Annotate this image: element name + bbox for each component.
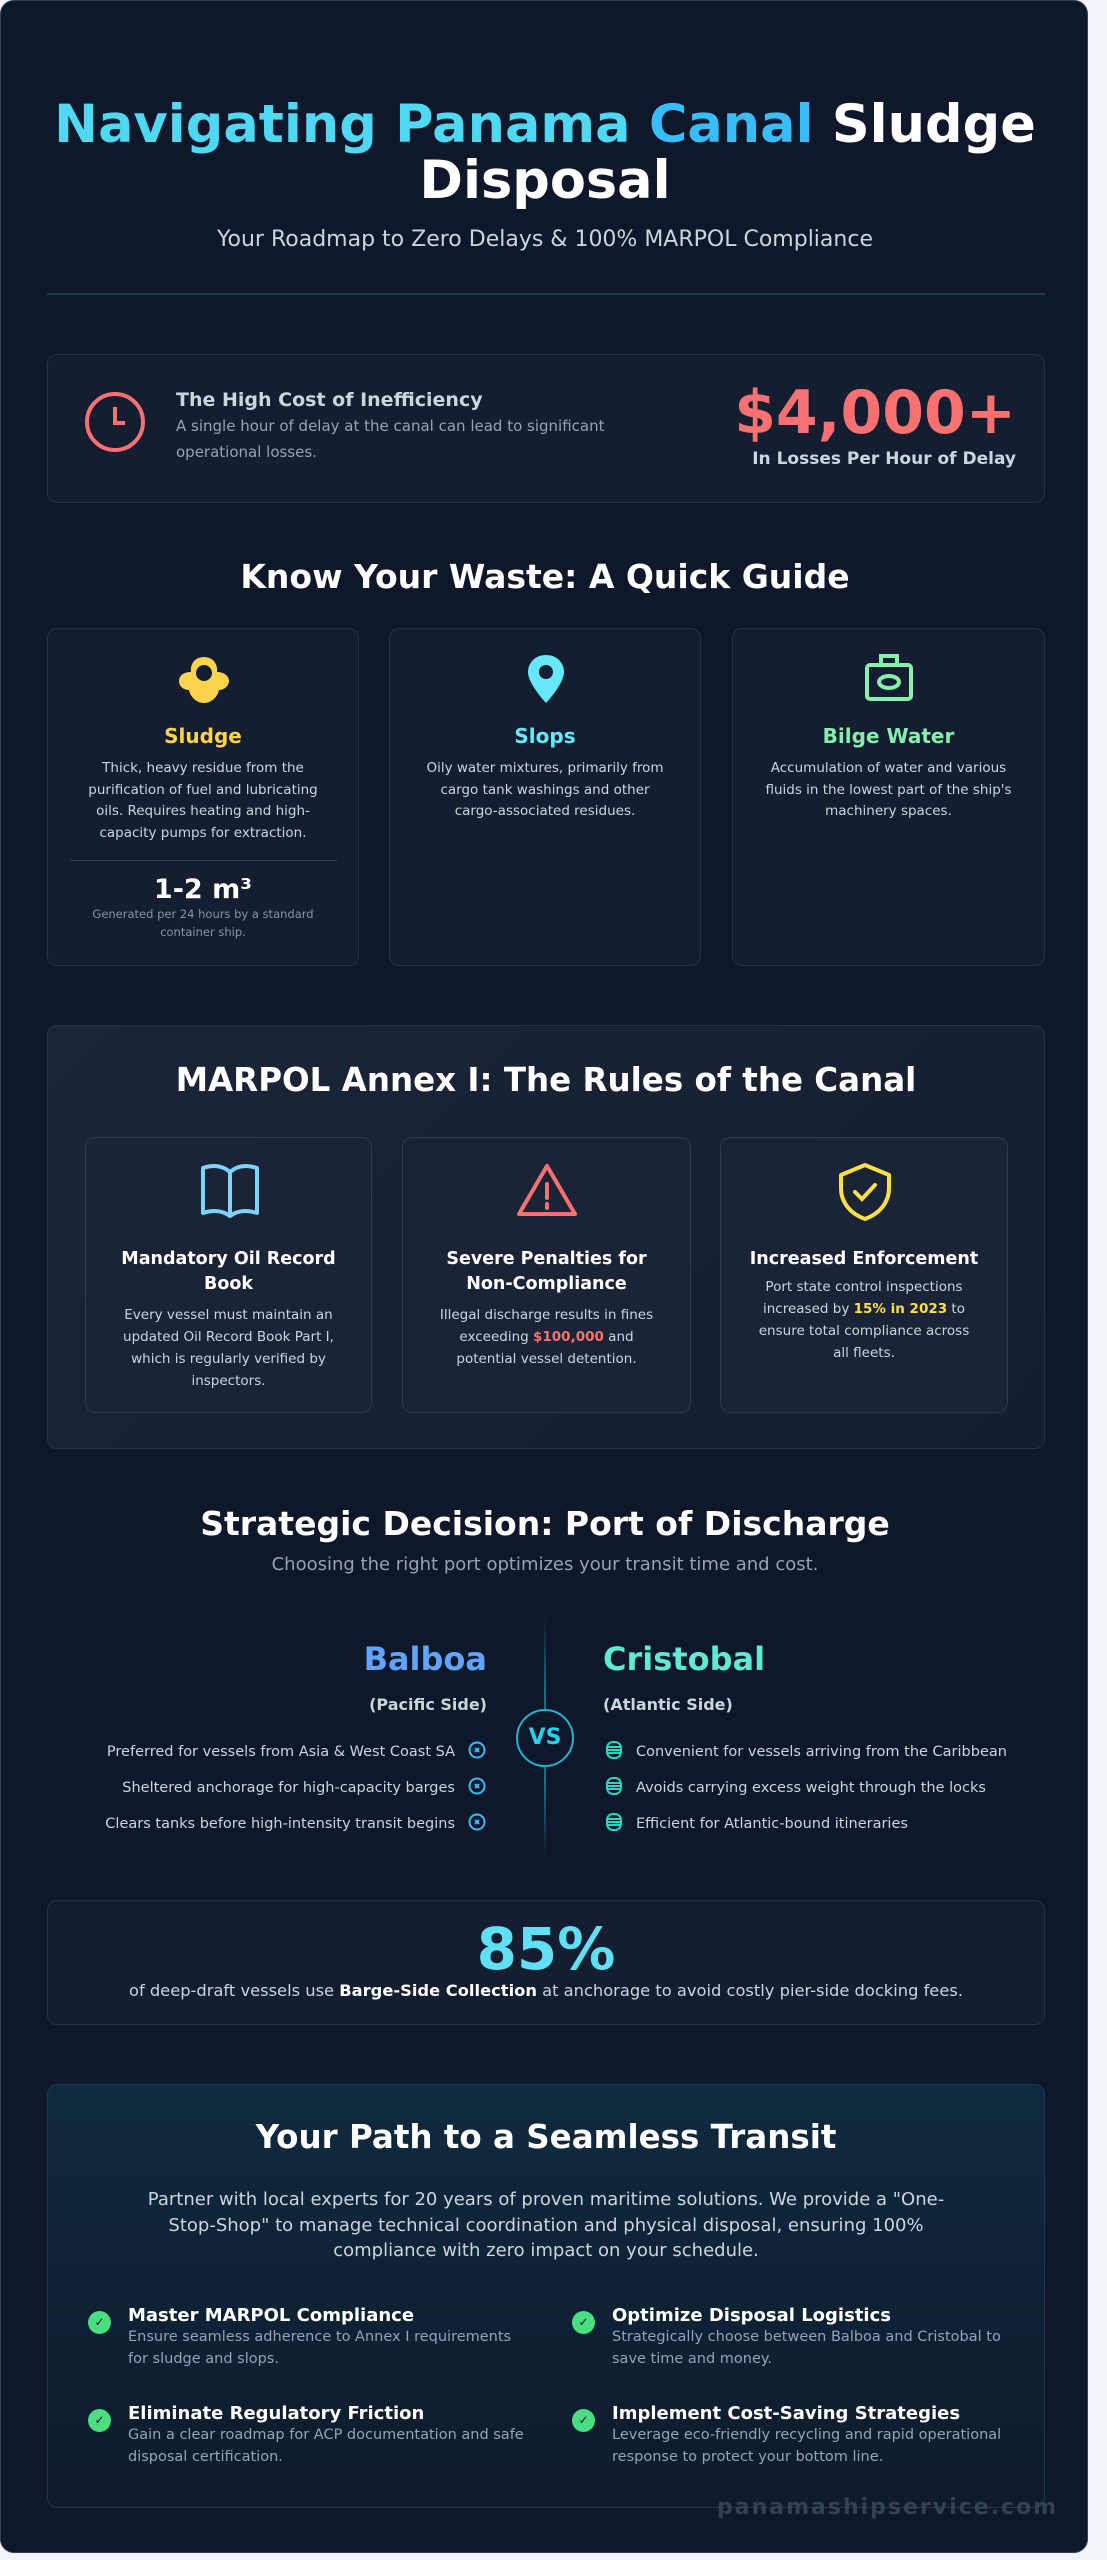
panel: Balboa: (Pacific Side) [369, 1695, 487, 1714]
subtitle: strategic: Choosing the right port optimizes your transit time and cost. [272, 1554, 818, 1575]
icon: sludge blob [179, 657, 229, 703]
stat: 1-2 m3 [92, 874, 314, 939]
card: enforcement [720, 1137, 1008, 1413]
text block: partner: Partner with local experts for 20 years of proven maritime solutions. We provide a "One-Stop-Shop" to manage technical coordination and physical disposal, ensuring 100% compliance with zero impact on your schedule. [148, 2189, 944, 2261]
item: eliminate friction: ✓ [94, 2413, 105, 2427]
card: enforcement: Increased Enforcement [750, 1249, 978, 1269]
panel: Cristobal: Cristobal [603, 1640, 765, 1678]
item: cost saving [572, 2403, 1001, 2465]
icon: clock [85, 392, 145, 452]
title: Navigating Panama Canal Sludge [54, 94, 1036, 155]
card: penalties: Illegal discharge results in fines exceeding $100,000 and potential vessel detention. [440, 1307, 653, 1367]
icon: VS circle [516, 1709, 574, 1767]
panel: Balboa: Clears tanks before high-intensity transit begins [105, 1816, 455, 1832]
panel: high cost [47, 354, 1045, 503]
panel: Cristobal [603, 1640, 1007, 1832]
panel: Cristobal: (Atlantic Side) [603, 1695, 733, 1714]
stat: $4,000+: In Losses Per Hour of Delay [752, 449, 1016, 469]
panel: Balboa: Balboa [364, 1640, 487, 1678]
panel: MARPOL [47, 1025, 1045, 1449]
panel: slops: Slops [514, 724, 576, 748]
icon: shield check [839, 1163, 891, 1221]
icon: VS circle: VS [529, 1725, 561, 1750]
icon: warning [516, 1164, 577, 1216]
item: master marpol: Ensure seamless adherence to Annex I requirements for sludge and slops. [128, 2329, 511, 2367]
text block: cost heading: operational losses. [176, 443, 317, 461]
panel: Balboa [105, 1640, 487, 1832]
card: oil record book: Every vessel must maintain an updated Oil Record Book Part I, which is regularly verified by inspectors. [123, 1307, 334, 1389]
item: cost saving: ✓ [578, 2413, 589, 2427]
item: cost saving: Implement Cost-Saving Strategies [612, 2403, 960, 2424]
item: eliminate friction [88, 2403, 524, 2465]
title: Disposal [419, 150, 671, 211]
item: eliminate friction: Gain a clear roadmap for ACP documentation and safe disposal certification. [128, 2427, 524, 2465]
item: master marpol: Master MARPOL Compliance [128, 2305, 414, 2326]
icon: pin [528, 655, 564, 703]
stat panel: 85%: of deep-draft vessels use Barge-Side Collection at anchorage to avoid costly pier-side docking fees. [129, 1981, 963, 2000]
icon: book [201, 1164, 259, 1218]
item: master marpol [88, 2305, 511, 2367]
checklist [88, 2305, 1001, 2465]
heading: seamless transit: Your Path to a Seamless Transit [256, 2118, 836, 2156]
card: oil record book: Mandatory Oil Record Book [121, 1249, 336, 1294]
item: eliminate friction: Eliminate Regulatory Friction [128, 2403, 424, 2424]
stat: 1-2 m3: Generated per 24 hours by a standard container ship. [92, 907, 314, 939]
item: optimize logistics [572, 2305, 1001, 2367]
heading: know your waste: Know Your Waste: A Quick Guide [240, 557, 850, 596]
panel: slops: Oily water mixtures, primarily from cargo tank washings and other cargo-associated residues. [426, 760, 664, 819]
card: oil record book [85, 1137, 372, 1413]
panel: Cristobal: Convenient for vessels arriving from the Caribbean [636, 1744, 1007, 1760]
panel: Cristobal: Efficient for Atlantic-bound itineraries [636, 1816, 908, 1832]
item: optimize logistics: Optimize Disposal Logistics [612, 2305, 891, 2326]
card: penalties: Severe Penalties for Non-Compliance [446, 1249, 647, 1294]
subtitle: Your Roadmap to Zero Delays & 100% MARPOL Compliance [217, 227, 873, 252]
panel: sludge: Sludge [164, 724, 242, 748]
panel: seamless transit [47, 2084, 1045, 2508]
stat: 1-2 m3: 1-2 m³ [154, 874, 252, 905]
item: optimize logistics: Strategically choose between Balboa and Cristobal to save time and money. [612, 2329, 1001, 2367]
panel: Cristobal: Avoids carrying excess weight through the locks [636, 1780, 986, 1796]
text block: cost heading: The High Cost of Inefficiency [176, 389, 483, 411]
panel: bilge water: Bilge Water [823, 724, 954, 748]
item: cost saving: Leverage eco-friendly recycling and rapid operational response to protect your bottom line. [612, 2427, 1001, 2465]
panel: sludge [47, 628, 359, 966]
item: optimize logistics: ✓ [578, 2315, 589, 2329]
item: master marpol: ✓ [94, 2315, 105, 2329]
panel: slops [389, 628, 701, 966]
text block: cost heading: A single hour of delay at the canal can lead to significant [176, 417, 604, 435]
panel: Balboa: Preferred for vessels from Asia & West Coast SA [107, 1744, 455, 1760]
panel: bilge water [732, 628, 1045, 966]
card: enforcement: Port state control inspections increased by 15% in 2023 to ensure total compliance across all fleets. [759, 1279, 969, 1361]
title [54, 94, 1036, 211]
panel: bilge water: Accumulation of water and various fluids in the lowest part of the ship's machinery spaces. [765, 760, 1012, 819]
panel: Balboa: Sheltered anchorage for high-capacity barges [122, 1780, 455, 1796]
panel: sludge: Thick, heavy residue from the purification of fuel and lubricating oils. Requires heating and high-capacity pumps for extraction. [88, 760, 318, 841]
icon: tank [865, 654, 913, 701]
stat: $4,000+: $4,000+ [734, 378, 1016, 448]
stat panel: 85% [47, 1900, 1045, 2025]
icons: cristobal bullets [606, 1741, 622, 1831]
stat panel: 85%: 85% [477, 1915, 615, 1983]
icons: balboa bullets [468, 1742, 486, 1830]
text block: cost heading [176, 389, 604, 461]
watermark: panamashipservice.com [717, 2495, 1058, 2520]
card: penalties [402, 1137, 691, 1413]
heading: strategic decision: Strategic Decision: Port of Discharge [200, 1504, 890, 1543]
heading: marpol: MARPOL Annex I: The Rules of the Canal [176, 1061, 916, 1099]
